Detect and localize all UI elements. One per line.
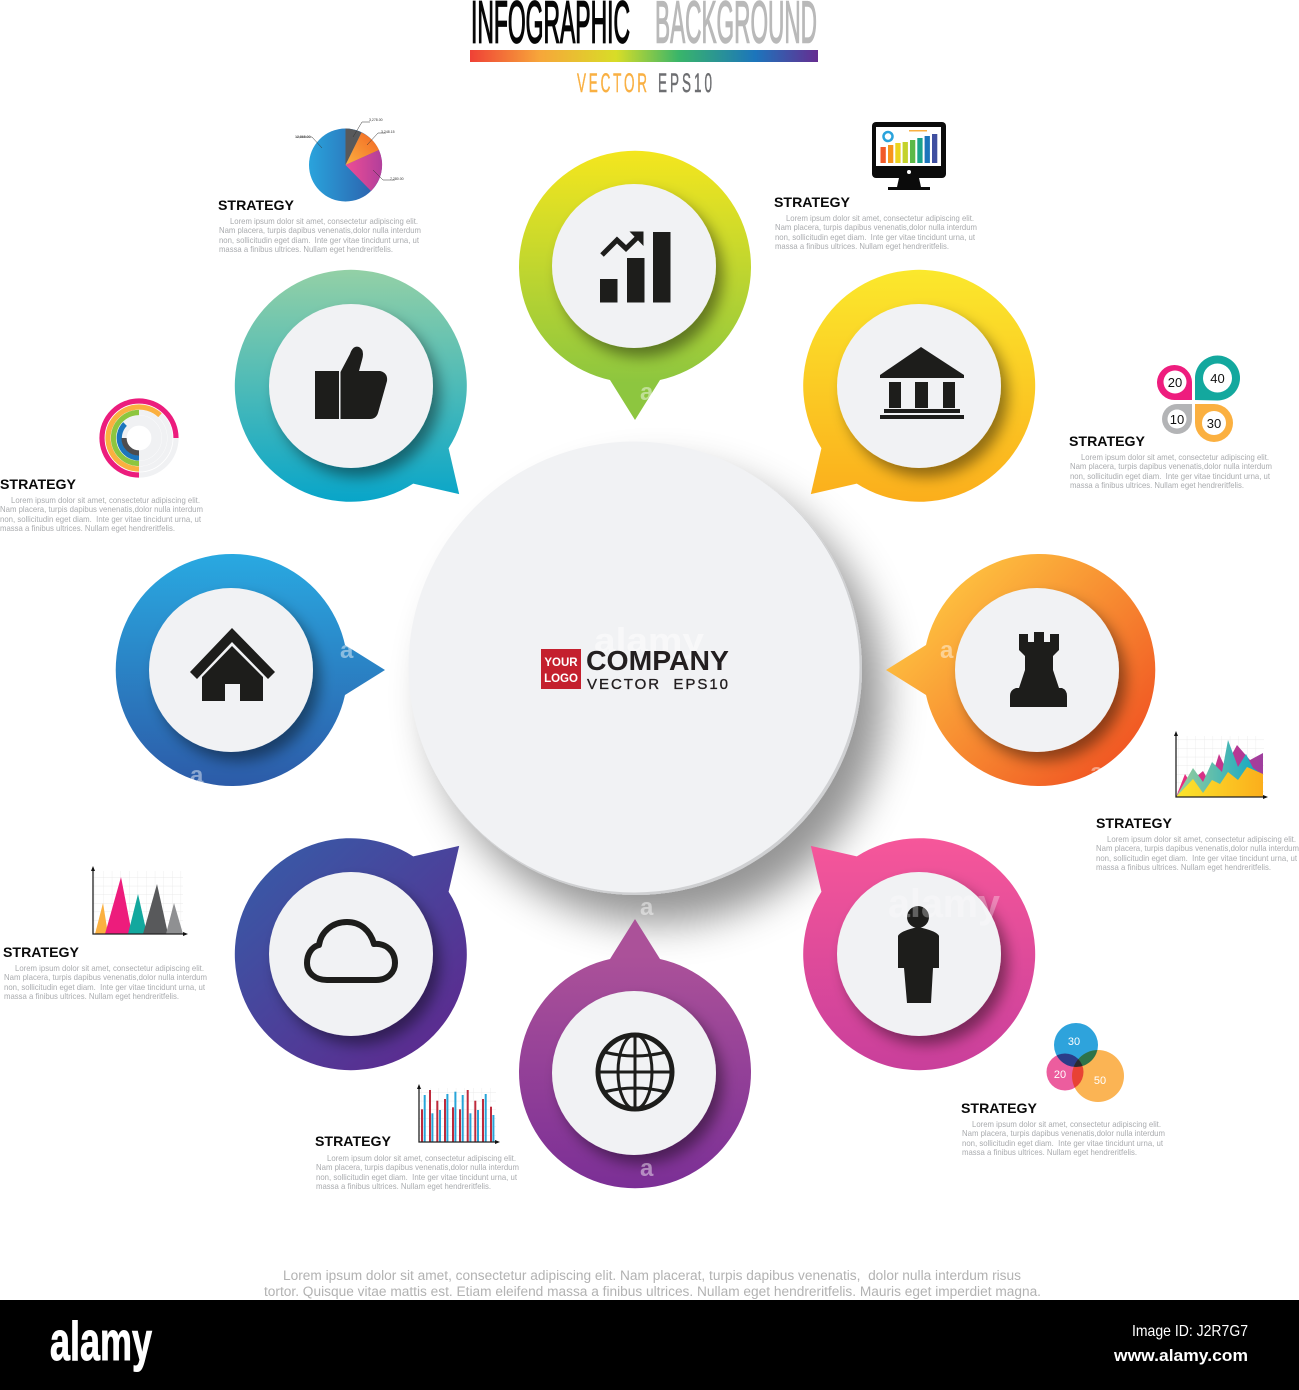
body text: Nam placera, turpis dapibus venenatis,dolor nulla interdum [316, 1162, 519, 1172]
radial ring chart [102, 401, 176, 475]
watermark marks: a [190, 762, 204, 789]
icon: chess rook [1010, 632, 1067, 707]
heading: STRATEGY [1096, 815, 1173, 831]
icon: thumbs up [315, 347, 387, 419]
body text [962, 1119, 1165, 1157]
icon: globe [598, 1035, 672, 1109]
body text: massa a finibus ultrices. Nullam eget hendreritfelis. [775, 241, 949, 251]
company subtitle: VECTOR EPS10 [587, 676, 728, 693]
icon: house [190, 628, 275, 701]
pie chart: 3,278.00 [369, 118, 383, 122]
body text: Lorem ipsum dolor sit amet, consectetur adipiscing elit. [1081, 452, 1269, 462]
footer logo: alamy [50, 1310, 152, 1372]
strategy block: pie chart [218, 118, 421, 254]
footer bar [0, 1300, 1299, 1390]
website: www.alamy.com [1113, 1346, 1248, 1365]
pin: blue house [116, 554, 385, 786]
watermark marks: a [640, 894, 654, 921]
triangle chart [91, 866, 188, 936]
venn diagram: 30 [1068, 1036, 1080, 1048]
heading: STRATEGY [0, 476, 77, 492]
body text: non, sollicitudin eget diam. Inte ger vitae tincidunt urna, ut [4, 982, 206, 992]
body text: non, sollicitudin eget diam. Inte ger vitae tincidunt urna, ut [962, 1138, 1164, 1148]
petal chart [1157, 356, 1240, 442]
petal chart: 40 [1210, 371, 1225, 386]
bottom paragraph: tortor. Quisque vitae mattis est. Etiam eleifend massa a finibus ultrices. Nullam eget hendreritfelis. Mauris eget imperdiet magna. [264, 1284, 1041, 1299]
body text: massa a finibus ultrices. Nullam eget hendreritfelis. [219, 244, 393, 254]
body text: massa a finibus ultrices. Nullam eget hendreritfelis. [316, 1181, 491, 1191]
watermark marks: a [1090, 759, 1104, 786]
icon: bar chart with arrow [600, 232, 670, 302]
pie chart: 3,248.15 [381, 130, 395, 134]
watermark marks: a [940, 637, 954, 664]
icon: cloud [307, 922, 395, 980]
central company circle: alamy [594, 622, 704, 660]
strategy block: radial rings [0, 401, 203, 533]
body text: non, sollicitudin eget diam. Inte ger vitae tincidunt urna, ut [0, 514, 202, 524]
pin: teal thumbs up [187, 222, 541, 576]
pie chart [295, 118, 404, 202]
body text: Nam placera, turpis dapibus venenatis,dolor nulla interdum [0, 504, 203, 514]
strategy block: triangle chart [3, 866, 207, 1001]
icon: monitor with chart [872, 122, 946, 190]
strategy block: monitor [774, 122, 977, 251]
logo square: LOGO [544, 673, 578, 685]
logo square [541, 649, 581, 689]
logo square: YOUR [544, 657, 578, 669]
body text: Lorem ipsum dolor sit amet, consectetur adipiscing elit. [972, 1119, 1161, 1129]
body text: Nam placera, turpis dapibus venenatis,dolor nulla interdum [775, 222, 977, 232]
heading: STRATEGY [1069, 433, 1146, 449]
strategy block: venn diagram [961, 1023, 1165, 1157]
pin: indigo cloud [187, 764, 541, 1118]
pin: yellow bank [729, 222, 1083, 576]
pin: pink person [729, 764, 1083, 1118]
body text: Nam placera, turpis dapibus venenatis,dolor nulla interdum [4, 972, 207, 982]
petal chart: 30 [1207, 416, 1221, 431]
body text: Lorem ipsum dolor sit amet, consectetur adipiscing elit. [11, 495, 200, 505]
area chart [1174, 731, 1268, 799]
petal chart: 20 [1168, 375, 1182, 390]
body text [4, 963, 207, 1001]
body text [1070, 452, 1272, 490]
body text [775, 213, 977, 251]
heading: STRATEGY [3, 944, 80, 960]
image id: Image ID: J2R7G7 [1132, 1323, 1248, 1340]
body text [0, 495, 203, 533]
pin: pink person: alamy [888, 882, 1001, 926]
icon: bank [880, 347, 964, 419]
bottom paragraph: Lorem ipsum dolor sit amet, consectetur adipiscing elit. Nam placerat, turpis dapibus venenatis, dolor nulla interdum risus [283, 1268, 1021, 1283]
venn diagram: 50 [1094, 1075, 1106, 1087]
strategy block: bar chart [315, 1084, 519, 1191]
body text: non, sollicitudin eget diam. Inte ger vitae tincidunt urna, ut [1070, 471, 1271, 481]
petal chart: 10 [1170, 412, 1184, 427]
heading: STRATEGY [315, 1133, 392, 1149]
body text: Nam placera, turpis dapibus venenatis,dolor nulla interdum [962, 1128, 1165, 1138]
pin: orange rook [886, 554, 1155, 786]
heading: STRATEGY [218, 197, 295, 213]
rainbow bar [470, 50, 818, 62]
body text: non, sollicitudin eget diam. Inte ger vitae tincidunt urna, ut [219, 235, 420, 245]
body text [219, 216, 421, 254]
body text: Lorem ipsum dolor sit amet, consectetur adipiscing elit. [786, 213, 974, 223]
bar chart [417, 1084, 500, 1144]
heading: STRATEGY [961, 1100, 1038, 1116]
watermark marks: a [640, 1155, 654, 1182]
pie chart: 7,280.00 [390, 177, 404, 181]
watermark marks [190, 379, 1104, 1182]
body text: Lorem ipsum dolor sit amet, consectetur adipiscing elit. [230, 216, 418, 226]
title [470, 0, 818, 98]
central company circle [408, 442, 862, 895]
body text: Nam placera, turpis dapibus venenatis,dolor nulla interdum [219, 225, 421, 235]
venn diagram: 20 [1054, 1069, 1066, 1081]
subtitle: vector: VECTOR [577, 68, 647, 98]
body text: Lorem ipsum dolor sit amet, consectetur adipiscing elit. [327, 1153, 516, 1163]
bottom paragraph [264, 1268, 1041, 1299]
venn diagram [1046, 1023, 1124, 1102]
body text: Lorem ipsum dolor sit amet, consectetur adipiscing elit. [15, 963, 204, 973]
body text: Nam placera, turpis dapibus venenatis,dolor nulla interdum [1070, 461, 1272, 471]
pin: purple globe [519, 919, 751, 1188]
icon: person [898, 906, 939, 1003]
watermark marks: a [340, 637, 354, 664]
body text [316, 1153, 519, 1191]
strategy block: petals [1069, 356, 1272, 490]
body text: non, sollicitudin eget diam. Inte ger vitae tincidunt urna, ut [316, 1172, 518, 1182]
body text [1096, 834, 1299, 872]
body text: massa a finibus ultrices. Nullam eget hendreritfelis. [0, 523, 175, 533]
watermark marks: a [640, 379, 654, 406]
strategy block: area chart [1096, 731, 1299, 872]
pie chart: 12,865.00 [295, 135, 311, 139]
subtitle: eps10: EPS10 [658, 68, 712, 98]
body text: non, sollicitudin eget diam. Inte ger vitae tincidunt urna, ut [775, 232, 976, 242]
pin: green chart [519, 151, 751, 420]
company name: COMPANY [586, 645, 729, 676]
body text: massa a finibus ultrices. Nullam eget hendreritfelis. [962, 1147, 1137, 1157]
body text: massa a finibus ultrices. Nullam eget hendreritfelis. [4, 991, 179, 1001]
body text: massa a finibus ultrices. Nullam eget hendreritfelis. [1096, 862, 1271, 872]
heading: STRATEGY [774, 194, 851, 210]
body text: massa a finibus ultrices. Nullam eget hendreritfelis. [1070, 480, 1244, 490]
